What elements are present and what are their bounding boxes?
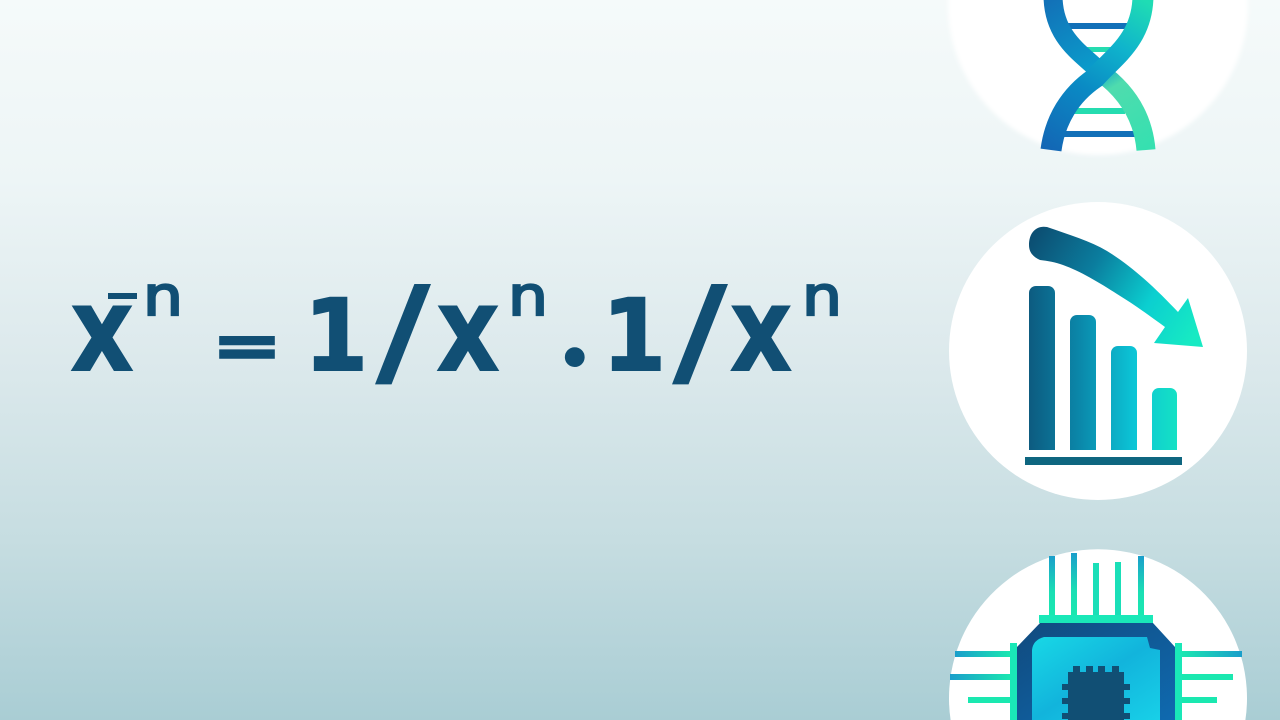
second fraction: 1/x^n [602, 260, 842, 402]
second fraction: 1/x^n: / [672, 260, 729, 402]
bar chart [1025, 286, 1182, 465]
first fraction: 1/x^n: n [508, 265, 548, 328]
second fraction: 1/x^n: 1 [602, 279, 666, 394]
chip body [1017, 623, 1175, 720]
first fraction: 1/x^n [304, 260, 548, 402]
arrow: downward trend [1029, 227, 1203, 347]
term: x bar to the n: n [143, 265, 183, 328]
chip pins [950, 553, 1242, 720]
term: x bar to the n: x [70, 260, 134, 398]
multiplication dot: . [560, 258, 590, 392]
formula: x to the minus n equals 1/x^n times 1/x^n [70, 258, 842, 402]
equals sign: = [212, 310, 282, 380]
icon: declining bar chart in circle [949, 202, 1247, 500]
icon: DNA helix in circle [948, 0, 1248, 155]
second fraction: 1/x^n: x [730, 260, 792, 398]
chip core [1062, 666, 1130, 720]
term: x bar to the n [70, 260, 183, 398]
first fraction: 1/x^n: / [375, 260, 432, 402]
second fraction: 1/x^n: n [802, 265, 842, 328]
chip face [1032, 637, 1160, 720]
first fraction: 1/x^n: x [436, 260, 500, 398]
first fraction: 1/x^n: 1 [304, 279, 368, 394]
icon: microchip in circle [949, 549, 1247, 720]
